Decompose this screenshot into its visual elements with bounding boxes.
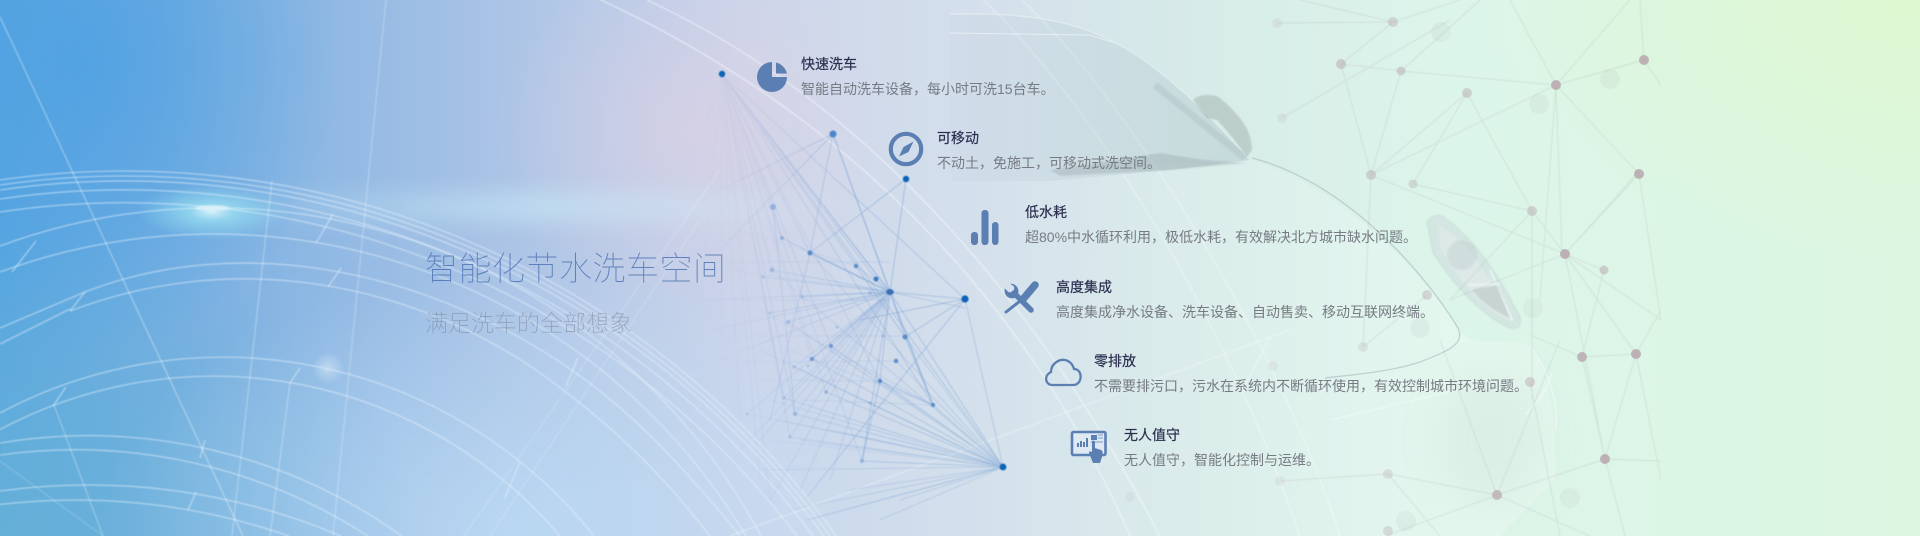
feature: 快速洗车: 快速洗车 xyxy=(801,56,857,72)
right network nodes xyxy=(1125,17,1649,536)
feature: 快速洗车 xyxy=(801,56,1055,97)
feature: 可移动: 可移动 xyxy=(937,130,979,146)
heading: 智能化节水洗车空间 xyxy=(425,250,726,287)
icon: cloud xyxy=(1045,358,1082,386)
icon: bar chart xyxy=(971,210,998,245)
network lines xyxy=(650,74,1003,520)
car silhouette xyxy=(950,14,1556,536)
right network lines xyxy=(1277,0,1661,536)
subheading: 满足洗车的全部想象 xyxy=(425,310,632,336)
feature: 快速洗车: 智能自动洗车设备，每小时可洗15台车。 xyxy=(801,81,1055,97)
headlight xyxy=(1427,215,1521,329)
icon: tools xyxy=(1004,281,1039,314)
feature: 高度集成: 高度集成净水设备、洗车设备、自动售卖、移动互联网终端。 xyxy=(1056,304,1434,320)
icon: compass xyxy=(888,132,924,166)
hood line xyxy=(1252,158,1460,378)
feature: 低水耗 xyxy=(1025,204,1417,245)
feature: 低水耗: 超80%中水循环利用，极低水耗，有效解决北方城市缺水问题。 xyxy=(1025,229,1417,245)
wiper xyxy=(1050,153,1247,176)
right network xyxy=(1125,0,1661,536)
feature: 高度集成: 高度集成 xyxy=(1056,279,1112,295)
feature: 可移动 xyxy=(937,130,1161,171)
mirror xyxy=(1193,95,1252,157)
network nodes xyxy=(719,71,1006,470)
faint bokeh circles xyxy=(1410,70,1620,338)
feature: 可移动: 不动土，免施工，可移动式洗空间。 xyxy=(937,155,1161,171)
light streak and flares xyxy=(137,184,840,384)
bumper highlights xyxy=(1330,345,1556,430)
windshield xyxy=(950,14,1250,181)
feature: 无人值守 xyxy=(1124,427,1320,468)
icon: pie chart xyxy=(757,62,787,92)
car body xyxy=(950,160,1556,536)
feature: 无人值守: 无人值守 xyxy=(1124,427,1180,443)
icon: touch screen xyxy=(1070,430,1107,463)
long sweeping arcs and straight lines xyxy=(0,0,1340,536)
feature: 无人值守: 无人值守，智能化控制与运维。 xyxy=(1124,452,1320,468)
orbit ring lines xyxy=(0,171,836,536)
feature: 低水耗: 低水耗 xyxy=(1025,204,1067,220)
feature: 零排放: 不需要排污口，污水在系统内不断循环使用，有效控制城市环境问题。 xyxy=(1094,378,1528,394)
left network xyxy=(650,71,1006,520)
feature: 零排放: 零排放 xyxy=(1094,353,1136,369)
feature: 零排放 xyxy=(1094,353,1528,394)
feature: 高度集成 xyxy=(1056,279,1434,320)
